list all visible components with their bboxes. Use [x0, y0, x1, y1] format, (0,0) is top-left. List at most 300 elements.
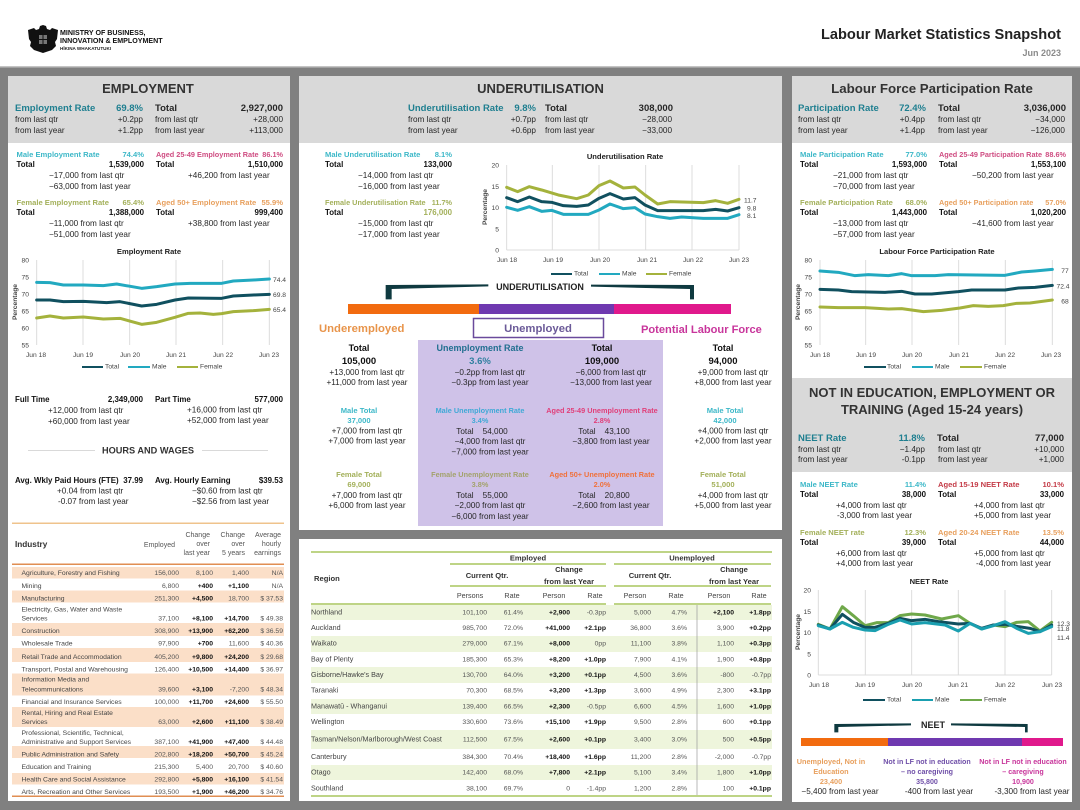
row: tasman-west coast: 112,500 — [463, 737, 487, 744]
aged 50+ employment stats: Aged 50+ Employment Rate — [156, 198, 256, 207]
row: professional: 387,100 — [154, 739, 179, 746]
line chart: underutilisation rate: Male — [622, 270, 637, 278]
column: potential labour force stats: +2,000 from last year — [694, 436, 772, 446]
panel: labour force participation — [792, 76, 1072, 378]
row: information media: 39,600 — [158, 687, 179, 694]
line chart: participation rate: Jun 20 — [902, 352, 922, 359]
bracket: underutilisation: UNDERUTILISATION — [496, 282, 584, 292]
row: construction: 308,900 — [154, 628, 179, 635]
line chart: NEET rate: NEET Rate — [910, 577, 948, 586]
heading: NEET: NOT IN EDUCATION, EMPLOYMENT OR — [809, 385, 1056, 400]
line chart: NEET rate: 11.4 — [1057, 635, 1070, 642]
female NEET stats: 12.3% — [904, 528, 926, 537]
row: wellington: 2.8% — [672, 719, 687, 726]
row: taranaki: 3,600 — [634, 688, 651, 695]
column: unemployment rate stats: 3.8% — [472, 480, 489, 489]
aged 20-24 NEET stats: -4,000 from last year — [976, 559, 1051, 568]
aged 25-49 participation stats: Total — [939, 160, 957, 169]
panel: employment — [8, 76, 290, 801]
line chart: underutilisation rate: Jun 22 — [683, 257, 703, 264]
aged 50+ participation stats: Total — [939, 208, 957, 217]
male underutilisation stats — [325, 150, 453, 191]
column: underemployed stats: +6,000 from last year — [328, 501, 406, 510]
row: auckland: 72.0% — [504, 625, 523, 632]
row: waikato: 67.1% — [504, 641, 523, 648]
aged 15-19 NEET stats: Total — [938, 490, 956, 499]
regional table header: Employed — [510, 554, 547, 562]
column: unemployment rate stats: 3.6% — [469, 356, 491, 367]
regional table header: Rate — [587, 591, 603, 600]
caregiving stats — [979, 758, 1070, 796]
row: information media: +3,100 — [192, 687, 213, 694]
aged 20-24 NEET stats: 44,000 — [1040, 538, 1065, 547]
column: unemployed total and age stats: Aged 25-49 Unemployment Rate — [546, 406, 658, 415]
row: manufacturing: 251,300 — [154, 596, 179, 602]
line chart: employment rate: 69.8 — [273, 292, 286, 299]
panel: regional table — [299, 539, 782, 801]
headline participation stats: +0.4pp — [900, 115, 925, 124]
column: potential labour force stats: +8,000 from last year — [694, 378, 772, 387]
headline underutilisation stats: from last year — [545, 126, 595, 135]
row: construction: +62,200 — [224, 628, 249, 635]
headline participation stats: from last year — [938, 126, 988, 135]
headline employment stats: from last year — [15, 126, 65, 135]
row: gisborne: 130,700 — [462, 672, 487, 679]
regional table header: from last Year — [544, 577, 594, 586]
row: bay of plenty — [311, 655, 771, 664]
row: manawatu-whanganui: +2,300 — [549, 703, 570, 710]
line chart: NEET rate: 12.3 — [1057, 621, 1070, 628]
male employment stats: −17,000 from last qtr — [49, 171, 125, 180]
wages stats: Avg. Hourly Earning — [155, 476, 231, 485]
column: unemployment rate stats: 3.4% — [472, 416, 489, 425]
line chart: NEET rate: 10 — [804, 630, 811, 637]
female NEET stats: +6,000 from last qtr — [836, 549, 907, 558]
female participation stats: 68.0% — [905, 198, 927, 207]
aged 25-49 employment stats: 86.1% — [262, 150, 283, 159]
line chart: employment rate: 70 — [22, 292, 29, 298]
row: manufacturing: $ 37.53 — [260, 596, 283, 602]
heading: underutilisation: UNDERUTILISATION — [477, 81, 604, 96]
female participation stats — [800, 198, 928, 239]
panel: unemployed purple block — [418, 340, 663, 526]
row: manufacturing — [22, 596, 283, 602]
female participation stats: 1,443,000 — [892, 208, 928, 217]
line chart: employment rate: 55 — [22, 342, 29, 350]
column: unemployment rate stats: Total 55,000 — [456, 491, 508, 500]
line chart: NEET rate: 0 — [807, 672, 811, 680]
label: underemployed: Underemployed — [319, 323, 404, 335]
row: manawatu-whanganui: 1,600 — [717, 703, 734, 710]
row: electricity — [22, 607, 283, 623]
row: agriculture: Agriculture, Forestry and Fishing — [22, 570, 120, 577]
female employment stats: −11,000 from last qtr — [49, 219, 124, 228]
line chart: NEET rate: Jun 21 — [948, 682, 968, 689]
headline underutilisation stats — [408, 103, 673, 135]
row: arts: +46,200 — [224, 789, 249, 796]
aged 25-49 participation stats: Aged 25-49 Participation Rate — [939, 150, 1042, 159]
row: canterbury: +18,400 — [545, 754, 570, 761]
female participation stats: Total — [800, 208, 818, 217]
column: unemployed total and age stats: 2.8% — [594, 416, 611, 425]
no caregiving stats: – no caregiving — [901, 768, 953, 776]
row: taranaki: 68.5% — [504, 688, 523, 695]
row: arts: 193,500 — [154, 789, 179, 796]
row: wellington: 600 — [723, 719, 734, 726]
row: otago: 68.0% — [504, 770, 523, 777]
row: education: 215,300 — [154, 764, 179, 771]
row: taranaki: +1.3pp — [584, 688, 606, 695]
female employment stats: −51,000 from last year — [49, 230, 131, 239]
line chart: NEET rate: 15 — [804, 609, 811, 616]
line chart: underutilisation rate: Jun 19 — [543, 257, 563, 264]
header band — [0, 0, 1080, 68]
row: gisborne: -800 — [720, 672, 734, 679]
row: bay of plenty: 1,900 — [717, 657, 734, 664]
row: canterbury: +1.6pp — [584, 754, 606, 761]
line chart: employment rate: 75 — [22, 274, 29, 282]
line chart: participation rate: 80 — [805, 258, 812, 264]
no caregiving stats — [883, 758, 973, 796]
row: tasman-west coast: +0.5pp — [749, 737, 771, 744]
row: southland: 2.8% — [672, 785, 687, 792]
column: potential labour force stats: 42,000 — [713, 416, 737, 425]
row: canterbury: 11,200 — [631, 754, 651, 761]
row: retail: 405,200 — [154, 654, 179, 661]
male underutilisation stats: Total — [325, 160, 343, 169]
headline underutilisation stats: +0.6pp — [511, 126, 536, 135]
headline NEET stats: from last year — [938, 455, 988, 464]
line chart: NEET rate: 5 — [807, 652, 811, 658]
row: tasman-west coast: 3,400 — [634, 737, 651, 744]
male underutilisation stats: −14,000 from last qtr — [358, 171, 434, 180]
row: professional: +41,900 — [188, 739, 213, 746]
headline NEET stats: −1.4pp — [900, 445, 925, 454]
male NEET stats: Total — [800, 490, 818, 499]
line chart: NEET rate: Jun 19 — [855, 682, 875, 689]
line chart: participation rate: 77 — [1061, 268, 1069, 275]
female underutilisation stats: 176,000 — [423, 208, 453, 217]
line chart: underutilisation rate: Jun 20 — [590, 257, 610, 264]
hours stats — [15, 476, 144, 506]
row: professional: +47,400 — [224, 739, 249, 746]
part time stats: +52,000 from last year — [187, 416, 269, 425]
row: auckland: +2.1pp — [584, 625, 606, 632]
row: arts: +1,900 — [192, 789, 213, 796]
row: auckland: Auckland — [311, 623, 341, 632]
male participation stats: −70,000 from last year — [833, 182, 915, 191]
headline NEET stats: 11.8% — [899, 433, 926, 444]
row: southland — [311, 783, 771, 792]
headline participation stats: from last year — [798, 126, 848, 135]
line chart: NEET rate: 20 — [804, 588, 811, 594]
row: southland: 38,100 — [466, 785, 487, 792]
wages stats: −$0.60 from last qtr — [192, 486, 263, 496]
headline participation stats: −34,000 — [1035, 115, 1065, 124]
row: otago: +7,800 — [549, 770, 570, 777]
row: auckland: 3,900 — [717, 625, 734, 632]
row: taranaki: 70,300 — [466, 688, 487, 695]
headline employment stats: from last qtr — [15, 115, 58, 124]
male employment stats — [16, 150, 145, 191]
line chart: underutilisation rate: Total — [574, 270, 589, 278]
row: electricity: 37,100 — [158, 616, 179, 623]
row: financial — [22, 699, 283, 706]
line chart: underutilisation rate: 8.1 — [747, 213, 757, 220]
female employment stats: Female Employment Rate — [16, 198, 109, 207]
row: gisborne — [311, 670, 771, 679]
line chart: underutilisation rate: Underutilisation Rate — [587, 152, 663, 161]
row: wholesale: Wholesale Trade — [22, 641, 73, 648]
row: northland — [311, 607, 771, 616]
regional table header: Change — [720, 565, 748, 574]
heading: NEET: TRAINING (Aged 15-24 years) — [841, 402, 1023, 417]
column: potential labour force stats: Male Total — [707, 406, 743, 415]
caregiving stats: – caregiving — [1002, 768, 1044, 776]
heading: hours and wages: HOURS AND WAGES — [102, 446, 194, 456]
column: unemployment rate stats: −2,000 from last qtr — [455, 501, 526, 510]
row: bay of plenty: 185,300 — [462, 657, 487, 664]
row: wellington: 330,600 — [462, 719, 487, 726]
regional table header: Persons — [457, 591, 484, 600]
headline underutilisation stats: +0.7pp — [511, 115, 536, 124]
line chart: NEET rate: Female — [984, 696, 1007, 704]
regional table header: Rate — [504, 591, 520, 600]
heading: NEET — [809, 385, 1056, 417]
row: manufacturing: +4,500 — [192, 596, 213, 602]
line chart: employment rate: Total — [105, 364, 120, 370]
female NEET stats — [800, 528, 927, 568]
row: canterbury: 70.4% — [504, 754, 523, 761]
male participation stats: 1,593,000 — [892, 160, 928, 169]
row: rental: $ 38.49 — [260, 719, 283, 726]
row: taranaki: Taranaki — [311, 686, 339, 695]
row: otago: 1,800 — [717, 770, 734, 777]
row: information media: $ 48.34 — [260, 687, 283, 694]
regional table header: Rate — [751, 591, 767, 600]
aged 15-19 NEET stats: 10.1% — [1042, 480, 1064, 489]
line chart: participation rate: 70 — [805, 292, 812, 298]
line chart: underutilisation rate: 0 — [495, 248, 499, 254]
full time stats: +60,000 from last year — [48, 417, 130, 426]
regional table header: Change — [555, 565, 583, 574]
column: unemployment rate stats: −0.3pp from last year — [451, 378, 529, 387]
male employment stats: −63,000 from last year — [49, 182, 131, 191]
row: rental: Rental, Hiring and Real Estate — [22, 710, 113, 717]
row: northland: +1.8pp — [749, 609, 771, 616]
caregiving stats: -3,300 from last year — [994, 787, 1070, 796]
row: southland: 69.7% — [504, 785, 523, 792]
line chart: participation rate: Jun 21 — [949, 352, 969, 359]
female employment stats: 1,388,000 — [109, 208, 145, 217]
row: agriculture — [22, 570, 283, 577]
line chart: NEET rate: Jun 18 — [809, 682, 829, 689]
line chart: employment rate: Jun 19 — [73, 352, 93, 359]
row: health: 292,800 — [154, 777, 179, 784]
column: potential labour force stats: Total — [713, 343, 733, 353]
industry table header: Industry — [15, 540, 48, 549]
row: waikato: 1,100 — [717, 641, 734, 648]
row: tasman-west coast — [311, 735, 771, 744]
row: wellington: 73.6% — [504, 719, 523, 726]
headline employment stats: +0.2pp — [118, 115, 143, 124]
wages stats: −$2.56 from last year — [192, 497, 269, 506]
column: underemployed stats: +7,000 from last qtr — [332, 426, 403, 436]
aged 50+ participation stats: 1,020,200 — [1031, 208, 1067, 217]
row: otago: Otago — [311, 768, 331, 777]
column: unemployed total and age stats: Total — [592, 343, 612, 353]
headline employment stats — [15, 103, 283, 135]
column: underemployed stats: +7,000 from last qtr — [332, 491, 403, 500]
headline employment stats: Employment Rate — [15, 103, 95, 114]
row: professional: Administrative and Support Services — [22, 739, 132, 746]
male NEET stats: Male NEET Rate — [800, 480, 858, 489]
row: waikato: 11,100 — [631, 641, 651, 648]
aged 15-19 NEET stats: 33,000 — [1040, 490, 1065, 499]
column: underemployed stats: +11,000 from last year — [326, 378, 408, 387]
row: auckland: 36,800 — [630, 625, 651, 632]
row: transport: +14,400 — [224, 667, 249, 674]
line chart: underutilisation rate — [482, 152, 757, 278]
male employment stats: Total — [16, 160, 35, 169]
line chart: underutilisation rate: Jun 21 — [637, 257, 657, 264]
aged 50+ participation stats: −41,600 from last year — [972, 219, 1054, 228]
headline participation stats: 3,036,000 — [1024, 103, 1066, 114]
no caregiving stats: 35,800 — [916, 778, 938, 786]
row: electricity: +8,100 — [192, 616, 213, 623]
row: waikato: 0pp — [595, 641, 606, 648]
headline participation stats: 72.4% — [899, 103, 927, 114]
row: southland: Southland — [311, 783, 343, 792]
row: wellington — [311, 717, 771, 726]
hours stats: +0.04 from last qtr — [57, 486, 123, 496]
logo text — [60, 29, 163, 51]
row: waikato — [311, 639, 771, 648]
male participation stats — [800, 150, 928, 191]
row: manawatu-whanganui: +1.0pp — [749, 703, 771, 710]
column: potential labour force stats: +5,000 from last year — [694, 501, 772, 510]
headline participation stats — [798, 103, 1066, 135]
row: wellington: 9,500 — [634, 719, 651, 726]
aged 15-19 NEET stats: Aged 15-19 NEET Rate — [938, 480, 1019, 489]
row: public administration: +18,200 — [188, 752, 213, 759]
table: industry — [12, 522, 284, 797]
row: financial: Financial and Insurance Services — [22, 699, 122, 706]
row: rental: 63,000 — [158, 719, 179, 726]
row: tasman-west coast: 67.5% — [504, 737, 523, 744]
label: unemployed box: Unemployed — [504, 323, 572, 335]
aged 20-24 NEET stats: Total — [938, 538, 956, 547]
row: taranaki: 2,300 — [717, 688, 734, 695]
column: underemployed stats: 105,000 — [342, 356, 376, 367]
headline participation stats: −126,000 — [1031, 126, 1065, 135]
row: education — [22, 764, 283, 771]
line chart: employment rate: 80 — [22, 258, 29, 264]
aged 15-19 NEET stats: +4,000 from last qtr — [974, 501, 1045, 510]
industry table header: 5 years — [222, 550, 245, 557]
male employment stats: 1,539,000 — [109, 160, 145, 169]
line chart: NEET rate: Total — [887, 696, 902, 704]
column: potential labour force stats: 94,000 — [708, 356, 738, 367]
row: waikato: +0.3pp — [749, 641, 771, 648]
line chart: underutilisation rate: 11.7 — [744, 198, 757, 204]
row: construction: Construction — [22, 628, 60, 635]
male underutilisation stats: Male Underutilisation Rate — [325, 150, 420, 159]
headline NEET stats: from last year — [798, 455, 848, 464]
row: information media: -7,200 — [230, 687, 249, 694]
row: manufacturing: Manufacturing — [22, 596, 65, 602]
line chart: participation rate: 68 — [1061, 298, 1069, 306]
row: northland: 4.7% — [672, 609, 687, 616]
row: northland: -0.3pp — [587, 609, 606, 616]
panel: NEET — [792, 378, 1072, 802]
industry table header: Change — [220, 532, 245, 539]
row: gisborne: -0.7pp — [752, 672, 771, 679]
row: southland: 1,200 — [634, 785, 651, 792]
row: financial: +24,600 — [224, 699, 249, 706]
male NEET stats: +4,000 from last qtr — [836, 501, 907, 510]
male participation stats: Total — [800, 160, 818, 169]
row: tasman-west coast: 3.0% — [672, 737, 687, 744]
line chart: underutilisation rate: 20 — [492, 162, 499, 170]
female underutilisation stats — [325, 198, 453, 239]
row: retail: +9,800 — [192, 654, 213, 661]
row: mining: N/A — [272, 583, 283, 590]
line chart: NEET rate: 11.8 — [1057, 626, 1070, 633]
aged 25-49 participation stats: −50,200 from last year — [972, 171, 1054, 180]
headline NEET stats: NEET Rate — [798, 433, 847, 444]
row: rental: +11,100 — [225, 719, 249, 726]
column: unemployment rate stats: −4,000 from last qtr — [455, 437, 526, 446]
row: auckland: +0.2pp — [749, 625, 771, 632]
headline participation stats: Participation Rate — [798, 103, 879, 114]
row: electricity: Electricity, Gas, Water and Waste — [22, 607, 122, 614]
column: underemployed stats: 37,000 — [347, 416, 371, 425]
male underutilisation stats: 8.1% — [435, 150, 452, 159]
aged 50+ employment stats: 999,400 — [254, 208, 284, 217]
column: underemployed stats: Total — [349, 343, 369, 353]
industry table header: hourly — [262, 541, 281, 548]
heading: employment: EMPLOYMENT — [102, 81, 194, 96]
label: potential labour force: Potential Labour Force — [641, 324, 762, 336]
female underutilisation stats: Female Underutilisation Rate — [325, 198, 426, 207]
row: northland: 61.4% — [504, 609, 523, 616]
column: underemployed stats: +7,000 from last year — [328, 436, 406, 446]
headline underutilisation stats: 308,000 — [639, 103, 673, 114]
row: otago: 5,100 — [634, 770, 651, 777]
line chart: employment rate: Jun 18 — [26, 352, 46, 359]
regional table header: Person — [624, 591, 646, 600]
aged 25-49 employment stats — [156, 150, 284, 180]
line chart: employment rate: Jun 22 — [213, 352, 233, 359]
row: financial: 100,000 — [154, 699, 179, 706]
row: wellington: Wellington — [311, 717, 344, 726]
industry table header — [15, 532, 281, 557]
line chart: employment rate: 65.4 — [273, 307, 286, 314]
female participation stats: −13,000 from last qtr — [833, 219, 909, 228]
row: waikato: 279,000 — [462, 641, 487, 648]
column: underemployed stats: 69,000 — [347, 480, 371, 489]
female employment stats: 65.4% — [122, 198, 144, 207]
column: underemployed stats: Female Total — [336, 470, 382, 479]
female NEET stats: +4,000 from last year — [836, 559, 913, 568]
column: unemployment rate stats: −0.2pp from last qtr — [455, 368, 526, 377]
male employment stats: Male Employment Rate — [16, 150, 100, 159]
row: wholesale: $ 40.36 — [260, 641, 283, 648]
unemployed not in education stats: −5,400 from last year — [801, 787, 879, 796]
row: wholesale: 11,600 — [229, 641, 249, 648]
row: gisborne: 3.6% — [672, 672, 687, 679]
